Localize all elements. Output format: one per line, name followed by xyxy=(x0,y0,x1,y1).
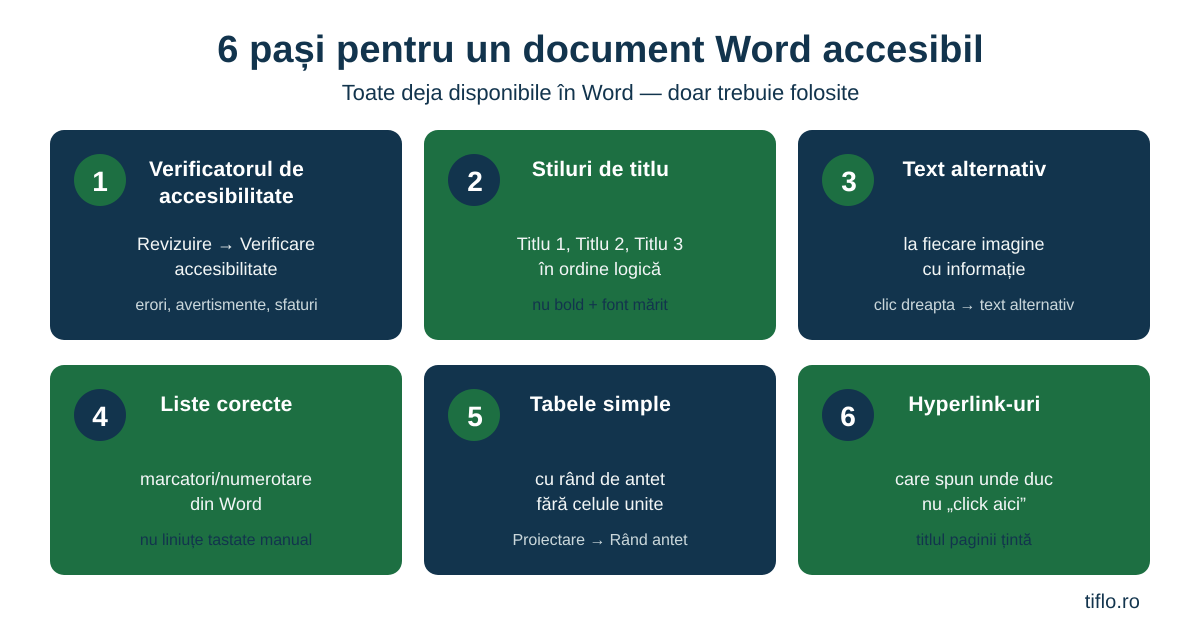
number badge 3: 3 xyxy=(841,166,857,197)
note 3: clic dreapta → text alternativ xyxy=(874,297,1074,314)
number badge 2 xyxy=(448,154,500,206)
panel: step 1 xyxy=(50,130,402,340)
body text 3 xyxy=(903,234,1045,279)
body text 4: din Word xyxy=(190,494,262,514)
heading 3: Text alternativ xyxy=(903,158,1046,181)
number badge 5 xyxy=(448,389,500,441)
number badge 6 xyxy=(822,389,874,441)
title: 6 pași pentru un document Word accesibil xyxy=(217,29,984,71)
footer brand: tiflo.ro xyxy=(1085,591,1140,613)
note 5: Proiectare → Rând antet xyxy=(513,532,687,549)
note 6: titlul paginii țintă xyxy=(916,532,1032,549)
body text 5: fără celule unite xyxy=(536,494,664,514)
body text 2 xyxy=(517,234,683,279)
panel: step 4 xyxy=(50,365,402,575)
heading 1: accesibilitate xyxy=(159,185,294,208)
body text 2: Titlu 1, Titlu 2, Titlu 3 xyxy=(517,234,683,254)
body text 5: cu rând de antet xyxy=(535,469,665,489)
body text 2: în ordine logică xyxy=(539,259,661,279)
body text 3: cu informație xyxy=(922,259,1026,279)
body text 1: Revizuire → Verificare xyxy=(137,234,315,254)
heading 4: Liste corecte xyxy=(160,393,293,416)
panel: step 5 xyxy=(424,365,776,575)
heading 1: Verificatorul de xyxy=(149,158,304,181)
heading 1 xyxy=(149,158,304,208)
heading 6: Hyperlink-uri xyxy=(908,393,1041,416)
number badge 1: 1 xyxy=(92,166,108,197)
panel: step 3 xyxy=(798,130,1150,340)
note 1: erori, avertismente, sfaturi xyxy=(135,297,318,314)
body text 1: accesibilitate xyxy=(174,259,278,279)
number badge 4 xyxy=(74,389,126,441)
body text 6 xyxy=(895,469,1053,514)
note 4: nu liniuțe tastate manual xyxy=(140,532,312,549)
panel: step 6 xyxy=(798,365,1150,575)
body text 3: la fiecare imagine xyxy=(903,234,1045,254)
body text 4: marcatori/numerotare xyxy=(140,469,312,489)
note 2: nu bold + font mărit xyxy=(532,297,668,314)
body text 1 xyxy=(137,234,315,279)
heading 5: Tabele simple xyxy=(530,393,671,416)
subtitle: Toate deja disponibile în Word — doar trebuie folosite xyxy=(342,80,859,105)
body text 6: care spun unde duc xyxy=(895,469,1053,489)
number badge 5: 5 xyxy=(467,401,483,432)
number badge 2: 2 xyxy=(467,166,483,197)
heading 2: Stiluri de titlu xyxy=(532,158,669,181)
body text 4 xyxy=(140,469,312,514)
number badge 3 xyxy=(822,154,874,206)
body text 5 xyxy=(535,469,665,514)
number badge 6: 6 xyxy=(840,401,856,432)
number badge 1 xyxy=(74,154,126,206)
panel: step 2 xyxy=(424,130,776,340)
body text 6: nu „click aici” xyxy=(922,494,1026,514)
number badge 4: 4 xyxy=(92,401,108,432)
